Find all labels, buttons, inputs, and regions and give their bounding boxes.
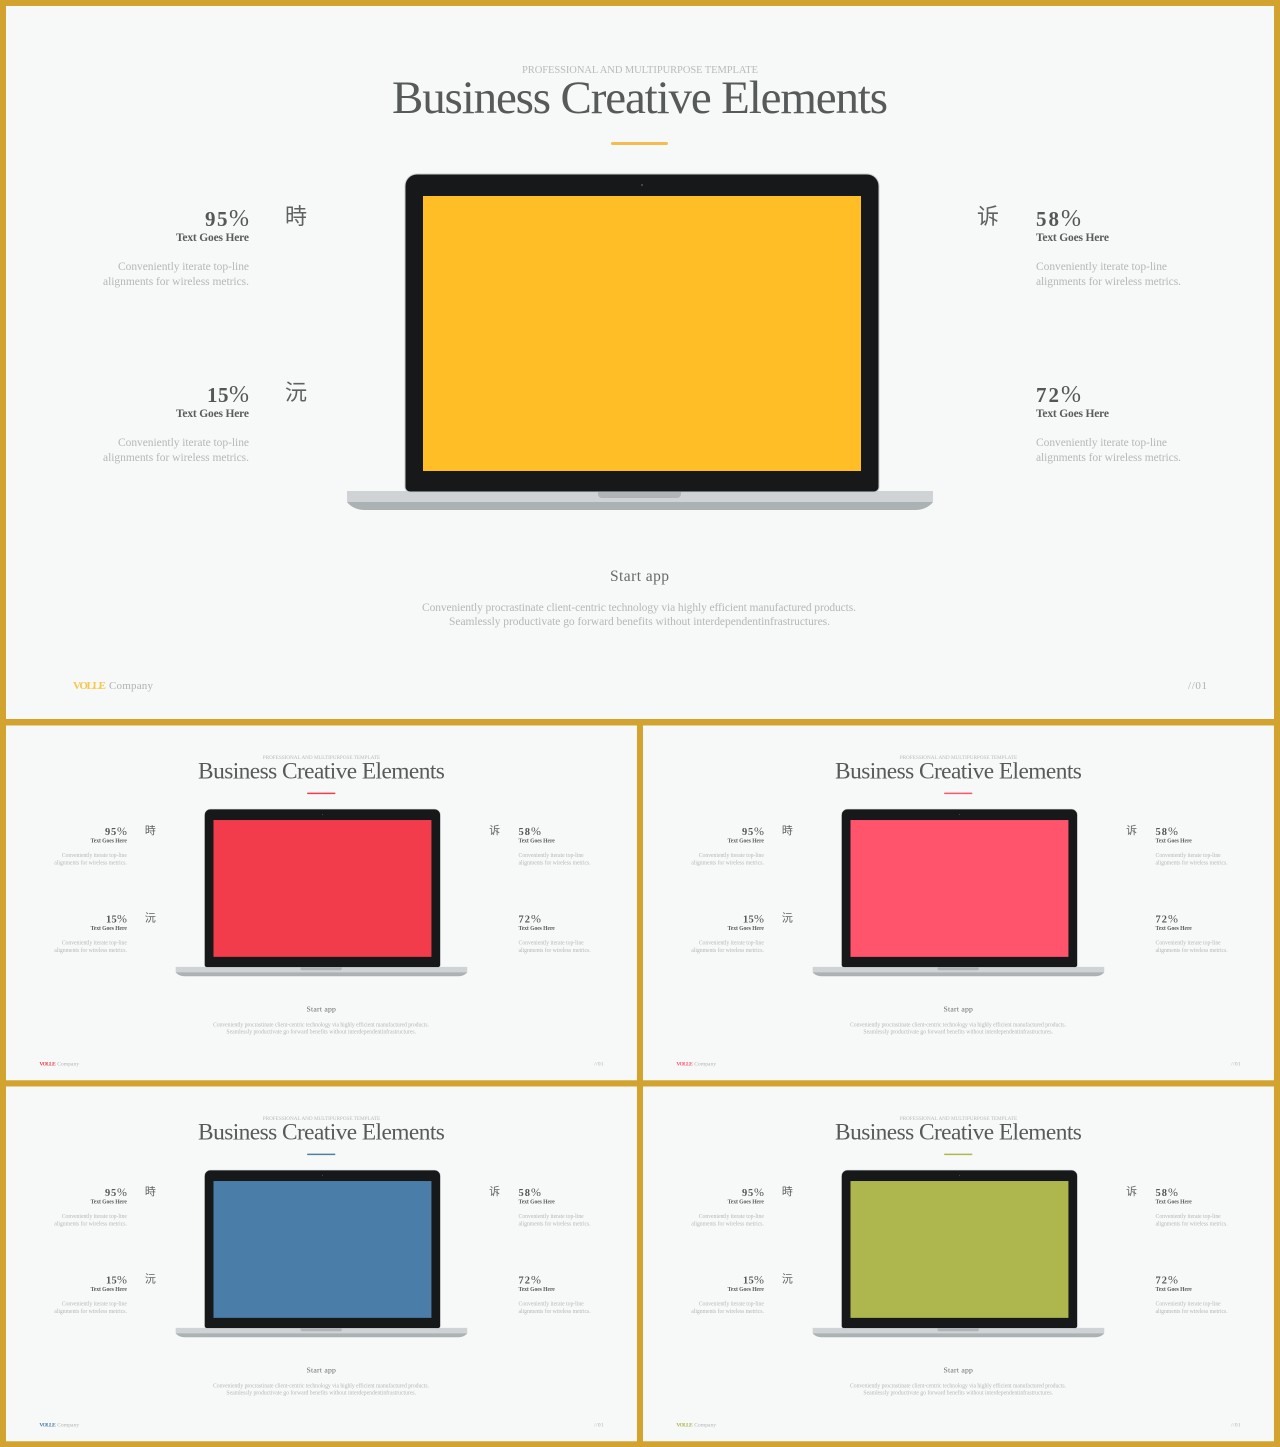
stat: 72%: alignments for wireless metrics. — [519, 947, 591, 954]
accent rule — [611, 142, 668, 145]
caption text: Conveniently procrastinate client-centric technology via highly efficient manufactured products. — [850, 1383, 1067, 1390]
stat: 58%: Text Goes Here — [519, 838, 555, 844]
stat: 72%: 72% — [1036, 382, 1081, 408]
stat: 72%: 72% — [1156, 912, 1178, 926]
footer brand: VOLLE — [73, 680, 106, 692]
stat: 58%: alignments for wireless metrics. — [1156, 1220, 1228, 1227]
caption heading: Start app — [307, 1366, 336, 1375]
stat: 15%: Conveniently iterate top-line — [699, 940, 764, 946]
page number: //01 — [594, 1061, 604, 1067]
accent rule — [307, 793, 335, 794]
stat: 15%: 15% — [106, 912, 127, 926]
caption text: Conveniently procrastinate client-centric technology via highly efficient manufactured products. — [213, 1383, 430, 1390]
laptop — [813, 1170, 1104, 1337]
stat: 72% — [519, 1273, 591, 1315]
stat: 72%: alignments for wireless metrics. — [519, 1308, 591, 1315]
slide background — [6, 6, 1274, 719]
panel: olive slide — [643, 1086, 1274, 1441]
caption text — [850, 1383, 1067, 1396]
icon: glyph top right: 诉 — [489, 824, 500, 837]
stat: 95%: Text Goes Here — [728, 1199, 764, 1205]
footer brand: Company — [694, 1422, 716, 1428]
stat: 15%: Text Goes Here — [176, 408, 249, 420]
stat: 95%: Conveniently iterate top-line — [62, 853, 127, 859]
caption heading: Start app — [944, 1005, 973, 1014]
stat: 15%: Conveniently iterate top-line — [62, 940, 127, 946]
stat: 95%: Text Goes Here — [91, 838, 127, 844]
stat: 15%: 15% — [106, 1273, 127, 1287]
stat: 58%: 58% — [519, 1185, 541, 1199]
caption text: Seamlessly productivate go forward benefits without interdependentinfrastructures. — [863, 1389, 1054, 1396]
stat: 15%: 15% — [743, 1273, 764, 1287]
stat: 58% — [1156, 824, 1228, 866]
stat: 58%: 58% — [519, 824, 541, 838]
footer brand: Company — [57, 1061, 79, 1067]
caption text — [213, 1022, 430, 1036]
stat: 95%: 95% — [105, 1185, 127, 1199]
laptop — [813, 809, 1104, 976]
laptop — [347, 174, 933, 510]
stat: 95%: Conveniently iterate top-line — [699, 853, 764, 859]
footer brand: Company — [694, 1061, 716, 1067]
caption text: Conveniently procrastinate client-centric technology via highly efficient manufactured products. — [213, 1022, 430, 1029]
eyebrow text: PROFESSIONAL AND MULTIPURPOSE TEMPLATE — [263, 1116, 380, 1122]
caption text: Conveniently procrastinate client-centric technology via highly efficient manufactured products. — [422, 602, 856, 614]
stat: 95%: alignments for wireless metrics. — [54, 1220, 127, 1227]
icon: glyph top right: 诉 — [977, 204, 999, 229]
stat: 58%: 58% — [1036, 206, 1081, 232]
stat: 15%: 15% — [743, 912, 764, 926]
stat: 15% — [691, 1273, 764, 1315]
eyebrow text: PROFESSIONAL AND MULTIPURPOSE TEMPLATE — [900, 755, 1017, 761]
stat: 58%: alignments for wireless metrics. — [1156, 859, 1228, 866]
footer brand — [39, 1422, 79, 1428]
icon: glyph top left: 時 — [285, 204, 307, 229]
panel: pink slide — [643, 725, 1274, 1080]
laptop — [176, 1170, 467, 1337]
stat: 58%: 58% — [1156, 1185, 1178, 1199]
stat: 58%: 58% — [1156, 824, 1178, 838]
stat: 72%: Text Goes Here — [519, 926, 555, 932]
page number: //01 — [1231, 1422, 1241, 1428]
stat: 72%: 72% — [519, 912, 541, 926]
stat: 95% — [54, 1185, 127, 1227]
stat: 15% — [103, 382, 249, 464]
stat: 95%: 95% — [742, 1185, 764, 1199]
stat: 15%: Text Goes Here — [728, 926, 764, 932]
stat: 95% — [691, 824, 764, 866]
stat: 95%: Text Goes Here — [91, 1199, 127, 1205]
slide background — [643, 1086, 1274, 1441]
stat: 58%: alignments for wireless metrics. — [1036, 276, 1181, 288]
stat: 72%: alignments for wireless metrics. — [1156, 1308, 1228, 1315]
footer brand — [676, 1061, 716, 1067]
stat: 95%: Conveniently iterate top-line — [699, 1214, 764, 1220]
stat: 72% — [519, 912, 591, 954]
icon: glyph bottom left: 沅 — [145, 1273, 156, 1286]
stat: 58%: Text Goes Here — [519, 1199, 555, 1205]
stat: 15%: alignments for wireless metrics. — [54, 1308, 127, 1315]
stat: 95%: Conveniently iterate top-line — [62, 1214, 127, 1220]
caption text: Seamlessly productivate go forward benefits without interdependentinfrastructures. — [226, 1028, 417, 1035]
icon: glyph top left: 時 — [145, 824, 156, 837]
stat: 58%: Text Goes Here — [1156, 1199, 1192, 1205]
stat: 72% — [1036, 382, 1181, 464]
stat: 58%: Conveniently iterate top-line — [1036, 261, 1167, 273]
stat: 72%: Text Goes Here — [1036, 408, 1109, 420]
title: Business Creative Elements — [198, 759, 445, 785]
icon: glyph bottom left: 沅 — [145, 912, 156, 925]
stat: 58% — [519, 824, 591, 866]
slide background — [6, 1086, 637, 1441]
footer brand — [39, 1061, 79, 1067]
stat: 95%: 95% — [205, 206, 249, 232]
footer brand — [73, 680, 154, 692]
stat: 15% — [691, 912, 764, 954]
caption text: Seamlessly productivate go forward benefits without interdependentinfrastructures. — [226, 1389, 417, 1396]
stat: 72%: Conveniently iterate top-line — [1156, 1301, 1221, 1307]
eyebrow text: PROFESSIONAL AND MULTIPURPOSE TEMPLATE — [522, 65, 758, 76]
footer brand: VOLLE — [676, 1061, 693, 1067]
stat: 95% — [103, 206, 249, 288]
stat: 15%: alignments for wireless metrics. — [691, 947, 764, 954]
stat: 72% — [1156, 912, 1228, 954]
page number: //01 — [1188, 680, 1207, 692]
caption heading: Start app — [307, 1005, 336, 1014]
stat: 15%: Text Goes Here — [91, 926, 127, 932]
slide background — [6, 725, 637, 1080]
stat: 95% — [54, 824, 127, 866]
stat: 58% — [1036, 206, 1181, 288]
stat: 72%: 72% — [1156, 1273, 1178, 1287]
stat: 95%: 95% — [105, 824, 127, 838]
stat: 72% — [1156, 1273, 1228, 1315]
caption text: Conveniently procrastinate client-centric technology via highly efficient manufactured products. — [850, 1022, 1067, 1029]
footer brand: Company — [57, 1422, 79, 1428]
icon: glyph top right: 诉 — [1126, 824, 1137, 837]
stat: 58% — [519, 1185, 591, 1227]
stat: 95%: Text Goes Here — [728, 838, 764, 844]
footer brand: VOLLE — [676, 1422, 693, 1428]
stat: 72%: Conveniently iterate top-line — [519, 940, 584, 946]
title: Business Creative Elements — [392, 72, 888, 124]
icon: glyph top left: 時 — [145, 1185, 156, 1198]
page number: //01 — [594, 1422, 604, 1428]
caption text: Seamlessly productivate go forward benefits without interdependentinfrastructures. — [449, 616, 830, 628]
stat: 72%: Conveniently iterate top-line — [1036, 437, 1167, 449]
stat: 72%: alignments for wireless metrics. — [1036, 452, 1181, 464]
slide background — [643, 725, 1274, 1080]
footer brand: VOLLE — [39, 1422, 56, 1428]
stat: 58%: Conveniently iterate top-line — [519, 1214, 584, 1220]
stat: 58%: Text Goes Here — [1036, 232, 1109, 244]
stat: 72%: alignments for wireless metrics. — [1156, 947, 1228, 954]
icon: glyph bottom left: 沅 — [782, 912, 793, 925]
panel: blue slide — [6, 1086, 637, 1441]
eyebrow text: PROFESSIONAL AND MULTIPURPOSE TEMPLATE — [900, 1116, 1017, 1122]
stat: 72%: Conveniently iterate top-line — [1156, 940, 1221, 946]
stat: 15% — [54, 1273, 127, 1315]
title: Business Creative Elements — [835, 1120, 1082, 1146]
accent rule — [944, 793, 972, 794]
stat: 58%: Conveniently iterate top-line — [1156, 1214, 1221, 1220]
caption heading: Start app — [610, 568, 669, 585]
stat: 58%: alignments for wireless metrics. — [519, 1220, 591, 1227]
stat: 58%: Conveniently iterate top-line — [1156, 853, 1221, 859]
stat: 15%: 15% — [207, 382, 249, 408]
stat: 95% — [691, 1185, 764, 1227]
icon: glyph top right: 诉 — [489, 1185, 500, 1198]
stat: 15%: alignments for wireless metrics. — [691, 1308, 764, 1315]
icon: glyph top left: 時 — [782, 824, 793, 837]
caption text — [850, 1022, 1067, 1036]
stat: 15%: Conveniently iterate top-line — [62, 1301, 127, 1307]
stat: 15%: Text Goes Here — [91, 1287, 127, 1293]
icon: glyph top left: 時 — [782, 1185, 793, 1198]
stat: 95%: Text Goes Here — [176, 232, 249, 244]
icon: glyph top right: 诉 — [1126, 1185, 1137, 1198]
caption text — [213, 1383, 430, 1396]
stat: 95%: alignments for wireless metrics. — [691, 859, 764, 866]
footer brand — [676, 1422, 716, 1428]
footer brand: Company — [109, 680, 154, 692]
stat: 72%: Text Goes Here — [519, 1287, 555, 1293]
stat: 58% — [1156, 1185, 1228, 1227]
accent rule — [944, 1154, 972, 1155]
laptop — [176, 809, 467, 976]
page number: //01 — [1231, 1061, 1241, 1067]
stat: 95%: alignments for wireless metrics. — [54, 859, 127, 866]
stat: 72%: 72% — [519, 1273, 541, 1287]
stat: 95%: alignments for wireless metrics. — [103, 276, 249, 288]
stat: 15%: Text Goes Here — [728, 1287, 764, 1293]
caption text — [422, 602, 856, 628]
panel: yellow slide — [6, 6, 1274, 719]
stat: 15% — [54, 912, 127, 954]
stat: 58%: alignments for wireless metrics. — [519, 859, 591, 866]
stat: 15%: alignments for wireless metrics. — [54, 947, 127, 954]
stat: 15%: Conveniently iterate top-line — [118, 437, 249, 449]
title: Business Creative Elements — [835, 759, 1082, 785]
eyebrow text: PROFESSIONAL AND MULTIPURPOSE TEMPLATE — [263, 755, 380, 761]
stat: 95%: 95% — [742, 824, 764, 838]
stat: 95%: alignments for wireless metrics. — [691, 1220, 764, 1227]
stat: 58%: Text Goes Here — [1156, 838, 1192, 844]
footer brand: VOLLE — [39, 1061, 56, 1067]
caption text: Seamlessly productivate go forward benefits without interdependentinfrastructures. — [863, 1028, 1054, 1035]
stat: 72%: Conveniently iterate top-line — [519, 1301, 584, 1307]
stat: 15%: alignments for wireless metrics. — [103, 452, 249, 464]
stat: 72%: Text Goes Here — [1156, 926, 1192, 932]
stat: 72%: Text Goes Here — [1156, 1287, 1192, 1293]
panel: red slide — [6, 725, 637, 1080]
stat: 15%: Conveniently iterate top-line — [699, 1301, 764, 1307]
accent rule — [307, 1154, 335, 1155]
stat: 58%: Conveniently iterate top-line — [519, 853, 584, 859]
icon: glyph bottom left: 沅 — [285, 380, 307, 405]
title: Business Creative Elements — [198, 1120, 445, 1146]
caption heading: Start app — [944, 1366, 973, 1375]
icon: glyph bottom left: 沅 — [782, 1273, 793, 1286]
stat: 95%: Conveniently iterate top-line — [118, 261, 249, 273]
